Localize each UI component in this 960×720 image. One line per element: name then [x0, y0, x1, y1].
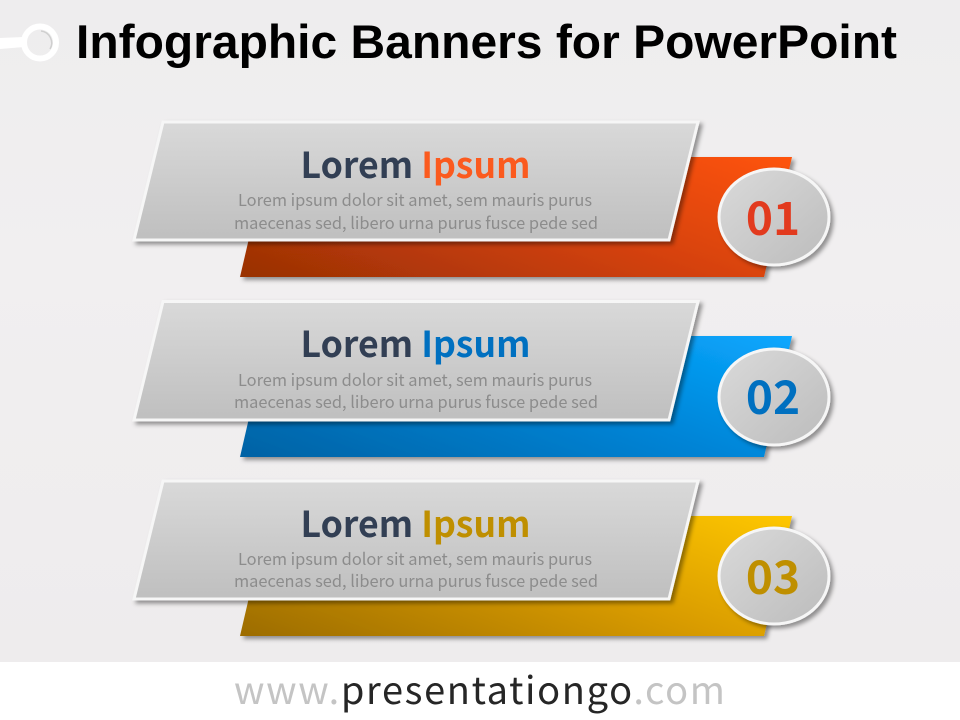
panel: grey parallelogram [134, 122, 698, 240]
body text: Lorem ipsum dolor sit amet, sem mauris purus [238, 367, 592, 391]
body text: maecenas sed, libero urna purus fusce pede sed [234, 568, 598, 592]
banner 02 [134, 302, 829, 457]
panel: grey parallelogram [134, 481, 698, 599]
number: 01 [746, 183, 800, 249]
number: 03 [746, 542, 800, 608]
heading: Lorem Ipsum [300, 496, 531, 548]
heading: Lorem Ipsum [300, 316, 531, 368]
number badge [719, 169, 829, 265]
ribbon: yellow [240, 516, 792, 636]
banner 03 [134, 481, 829, 636]
footer band [0, 662, 960, 720]
body text: Lorem ipsum dolor sit amet, sem mauris purus [238, 546, 592, 570]
panel: grey parallelogram [134, 302, 698, 420]
body text: maecenas sed, libero urna purus fusce pede sed [234, 389, 598, 413]
title: Infographic Banners for PowerPoint [76, 15, 897, 68]
banner 01 [134, 122, 829, 277]
number badge [719, 349, 829, 445]
heading: Lorem Ipsum [300, 137, 531, 189]
icon: title ring [0, 26, 56, 58]
ribbon: blue [240, 336, 792, 457]
ribbon: orange [240, 157, 792, 277]
body text: maecenas sed, libero urna purus fusce pede sed [234, 210, 598, 234]
number badge [719, 528, 829, 624]
footer url: www.presentationgo.com [234, 660, 725, 715]
body text: Lorem ipsum dolor sit amet, sem mauris purus [238, 187, 592, 211]
number: 02 [746, 362, 800, 428]
